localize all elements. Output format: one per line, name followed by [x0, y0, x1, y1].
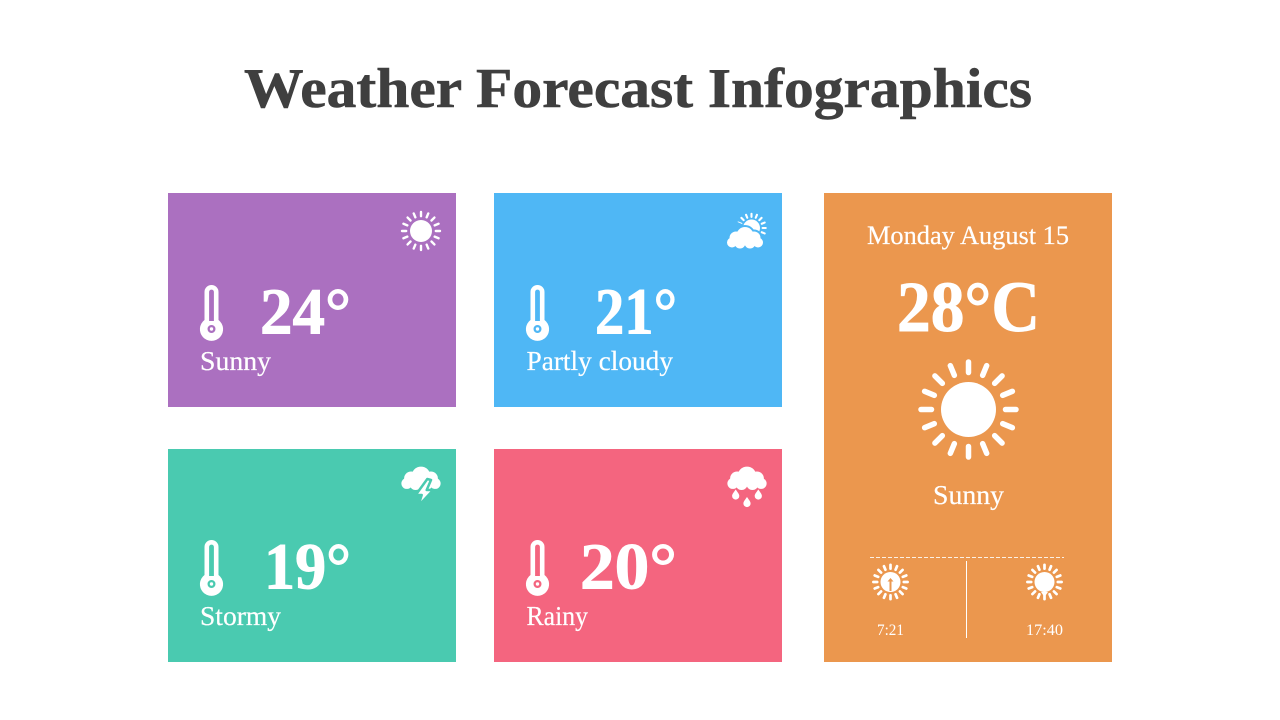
card background purple: [168, 193, 456, 407]
temperature 19: 19°: [264, 530, 351, 604]
icon: sunrise: [873, 565, 908, 599]
icon: storm cloud with lightning: [401, 467, 441, 506]
sunrise time: 7:21: [877, 622, 904, 639]
temperature 21: 21°: [595, 276, 677, 348]
icon: rain cloud with drops: [727, 467, 767, 507]
label partly cloudy: Partly cloudy: [526, 346, 674, 376]
label sunny: Sunny: [200, 346, 271, 376]
panel: stormy card: [168, 449, 456, 662]
icon: sun behind cloud: [727, 214, 766, 248]
temperature 28 C: 28°C: [897, 267, 1040, 347]
card background green: [168, 449, 456, 662]
icon: small sun: [402, 212, 440, 250]
card background blue: [494, 193, 782, 407]
icon: large sun: [921, 362, 1016, 457]
card background pink: [494, 449, 782, 662]
title: Weather Forecast Infographics: [244, 58, 1032, 120]
icon: thermometer: [526, 285, 549, 341]
icon: thermometer: [200, 285, 223, 341]
sunset time: 17:40: [1026, 622, 1063, 639]
label rainy: Rainy: [526, 601, 588, 631]
label stormy: Stormy: [200, 601, 282, 631]
label sunny: Sunny: [933, 480, 1004, 510]
card background orange: [824, 193, 1112, 662]
icon: sunset: [1027, 565, 1062, 599]
temperature 20: 20°: [580, 530, 677, 604]
panel: today forecast: [824, 193, 1112, 662]
panel: sunny card: [168, 193, 456, 407]
date: Monday August 15: [867, 221, 1069, 250]
panel: partly cloudy card: [494, 193, 782, 407]
temperature 24: 24°: [260, 276, 351, 348]
panel: rainy card: [494, 449, 782, 662]
icon: thermometer: [526, 540, 549, 596]
icon: thermometer: [200, 540, 223, 596]
